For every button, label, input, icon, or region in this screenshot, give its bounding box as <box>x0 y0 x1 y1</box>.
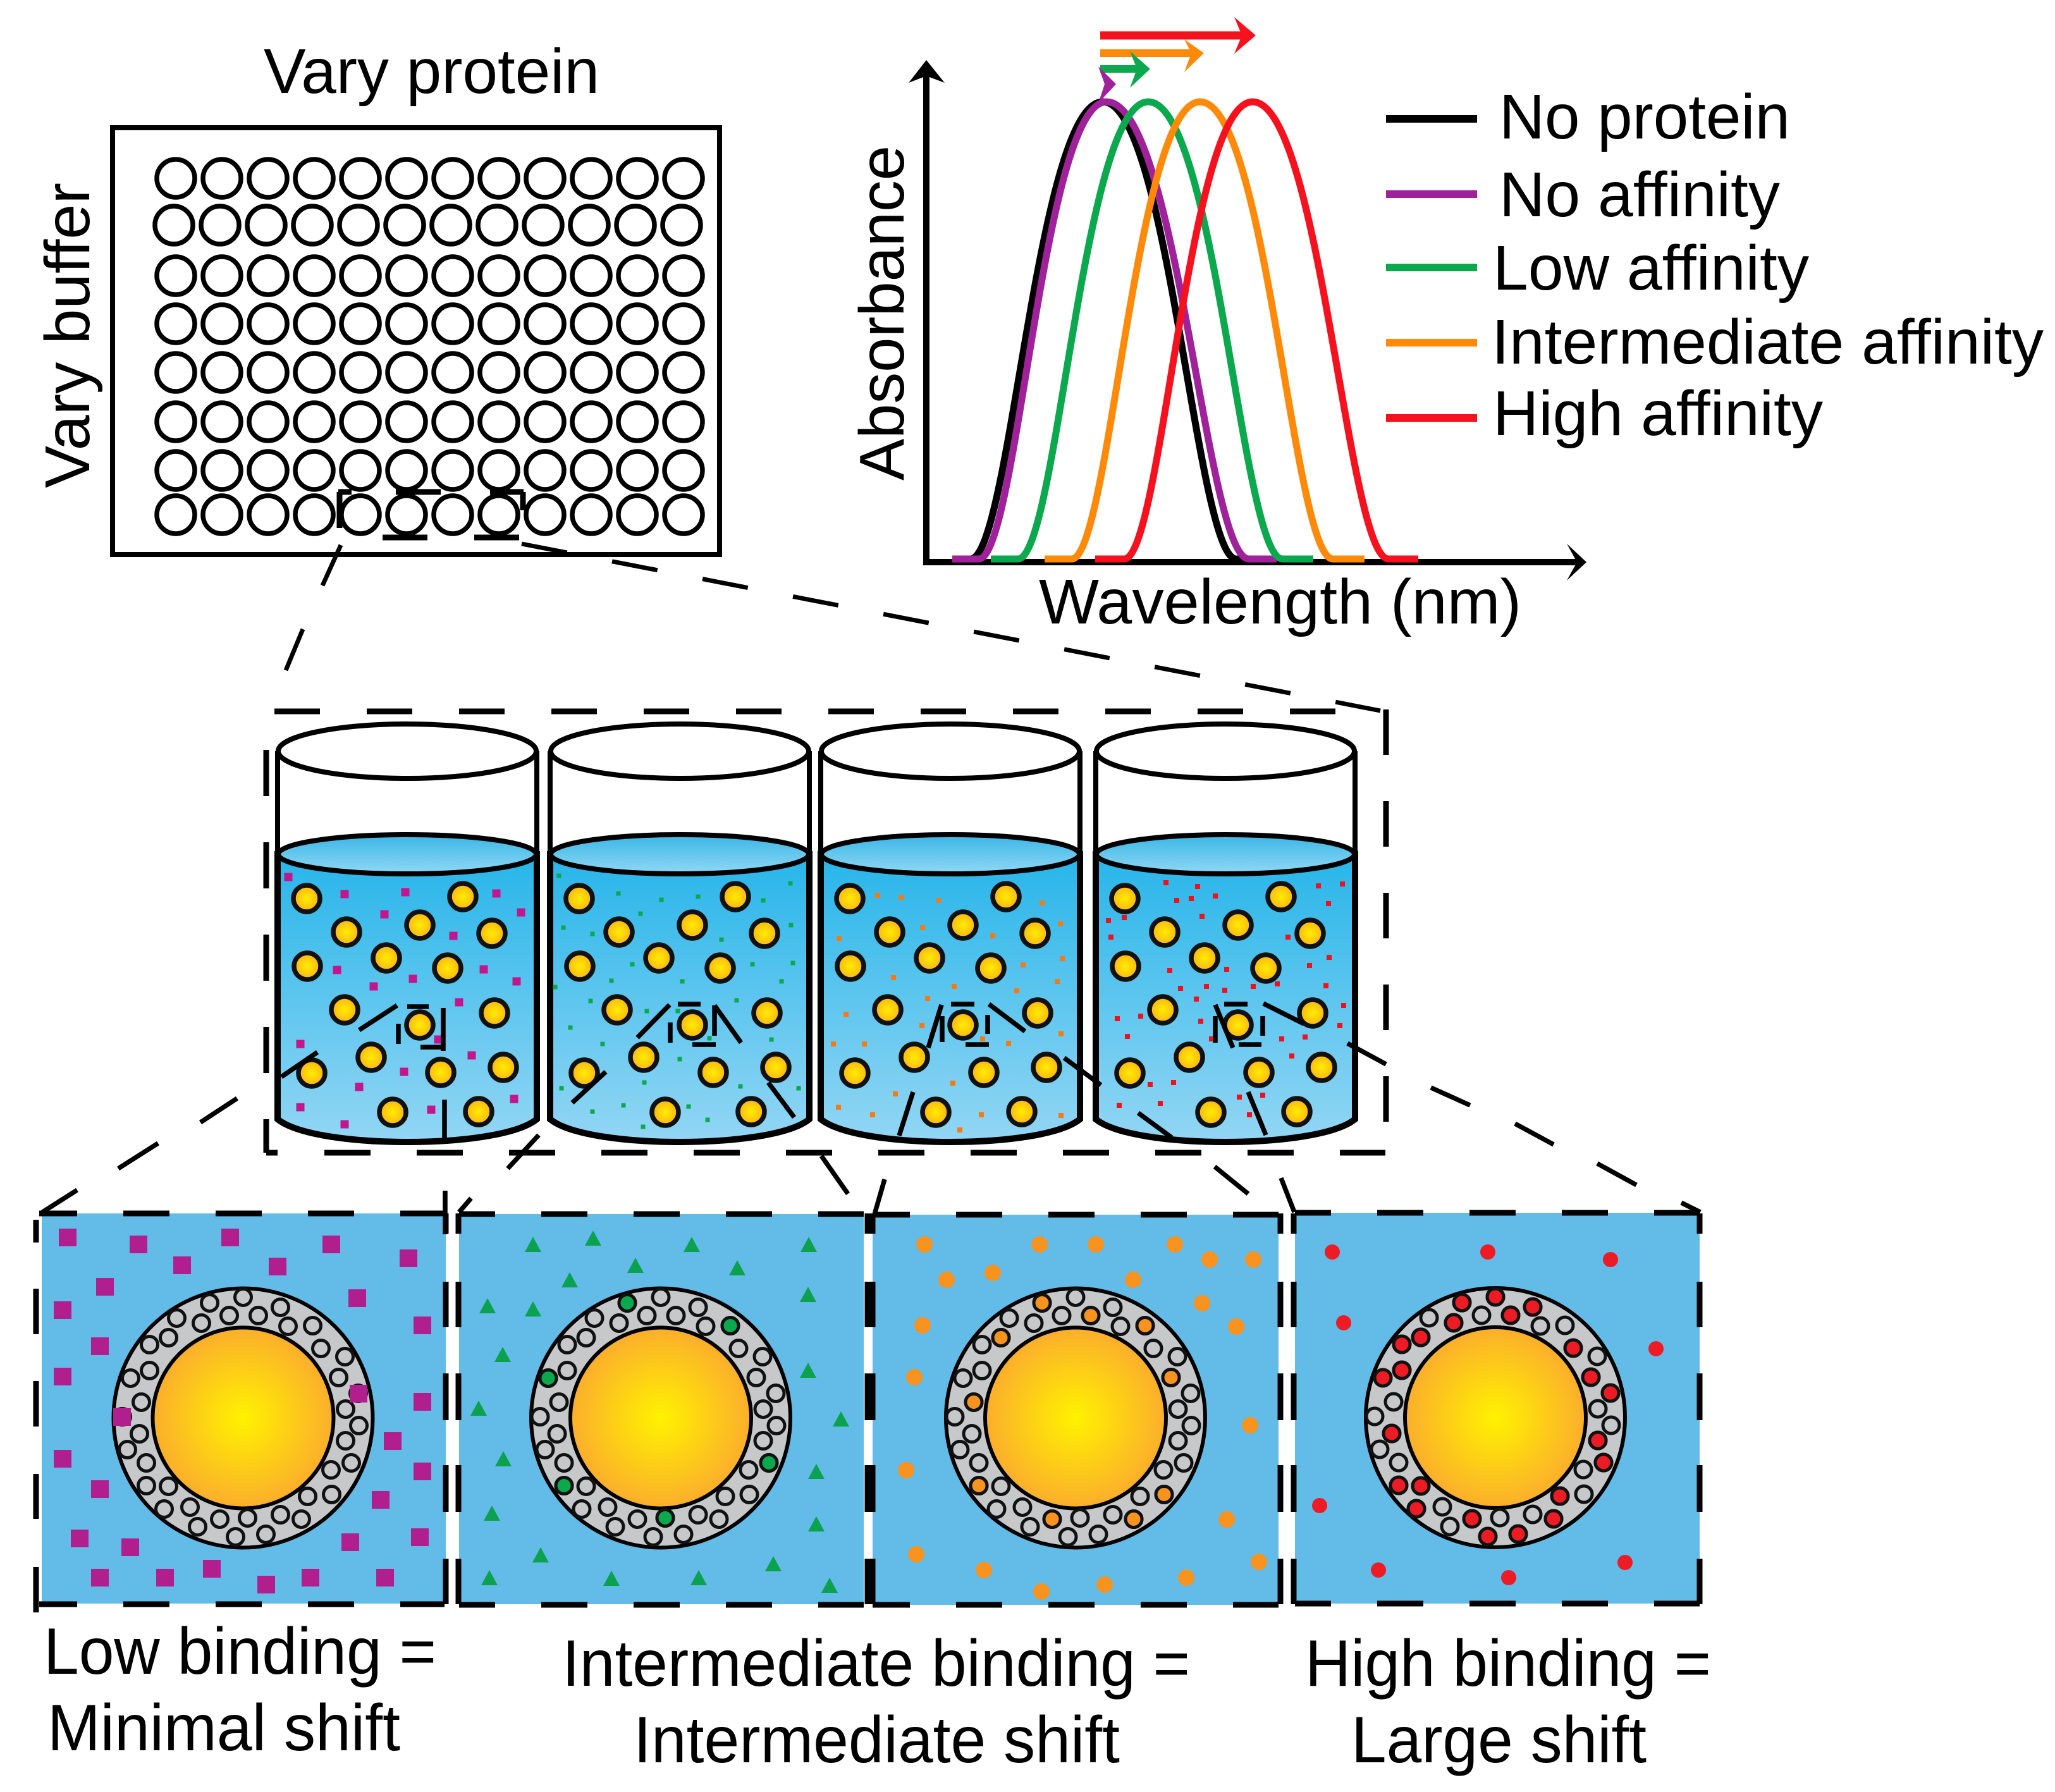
dashed panel borders <box>36 1213 1700 1612</box>
green protein particles <box>555 876 799 1127</box>
axis label: wavelength: Wavelength (nm) <box>1039 567 1521 637</box>
red protein particles <box>1108 883 1344 1115</box>
caption: high binding: High binding = <box>1305 1627 1711 1700</box>
bound green proteins <box>540 1295 777 1526</box>
legend: Low affinity <box>1493 233 1809 304</box>
panel: low binding magnified view <box>42 1213 446 1604</box>
bound orange proteins <box>966 1295 1179 1528</box>
legend: Intermediate affinity <box>1492 307 2044 377</box>
well selection marker <box>338 492 524 537</box>
orange protein particles <box>833 895 1062 1130</box>
panel: 96-well plate <box>113 128 720 555</box>
axis label: absorbance: Absorbance <box>847 145 917 481</box>
shift arrows <box>1098 17 1256 103</box>
caption: intermediate binding: Intermediate shift <box>634 1703 1120 1777</box>
beaker: intermediate affinity proteins <box>821 724 1080 1142</box>
beaker: high affinity proteins <box>1096 724 1355 1142</box>
well selection markers and leader lines to panels <box>42 1003 1700 1234</box>
heading: vary protein: Vary protein <box>264 36 599 107</box>
panel: high affinity magnified view <box>1295 1213 1700 1604</box>
beaker: low affinity proteins <box>550 724 809 1142</box>
panel: low affinity magnified view <box>459 1214 864 1604</box>
caption: intermediate binding <box>562 1627 1190 1777</box>
orange protein dots <box>906 1244 1259 1592</box>
caption: low binding <box>44 1615 436 1765</box>
heading: vary buffer: Vary buffer <box>32 183 103 488</box>
legend: No affinity <box>1499 159 1780 230</box>
chart: absorbance spectra <box>909 17 1586 580</box>
curves <box>952 102 1418 559</box>
dashed leader lines from plate to beakers <box>286 544 1380 711</box>
caption: high binding: Large shift <box>1351 1703 1647 1777</box>
beaker: no affinity proteins <box>278 724 537 1142</box>
axes <box>909 60 1586 580</box>
caption: low binding: Minimal shift <box>47 1691 400 1765</box>
caption: intermediate binding: Intermediate binding = <box>562 1627 1190 1700</box>
legend: No protein <box>1499 82 1790 152</box>
panel: intermediate affinity magnified view <box>873 1215 1279 1605</box>
legend <box>1386 82 2044 449</box>
red protein dots <box>1320 1252 1656 1578</box>
magenta protein squares <box>63 1237 422 1585</box>
dashed box around beakers <box>266 709 1386 1153</box>
bound red proteins <box>1375 1289 1619 1545</box>
legend: High affinity <box>1493 378 1823 449</box>
caption: low binding: Low binding = <box>44 1615 436 1688</box>
magenta protein particles <box>288 877 521 1124</box>
green protein triangles <box>470 1230 849 1593</box>
caption: high binding <box>1305 1627 1711 1777</box>
